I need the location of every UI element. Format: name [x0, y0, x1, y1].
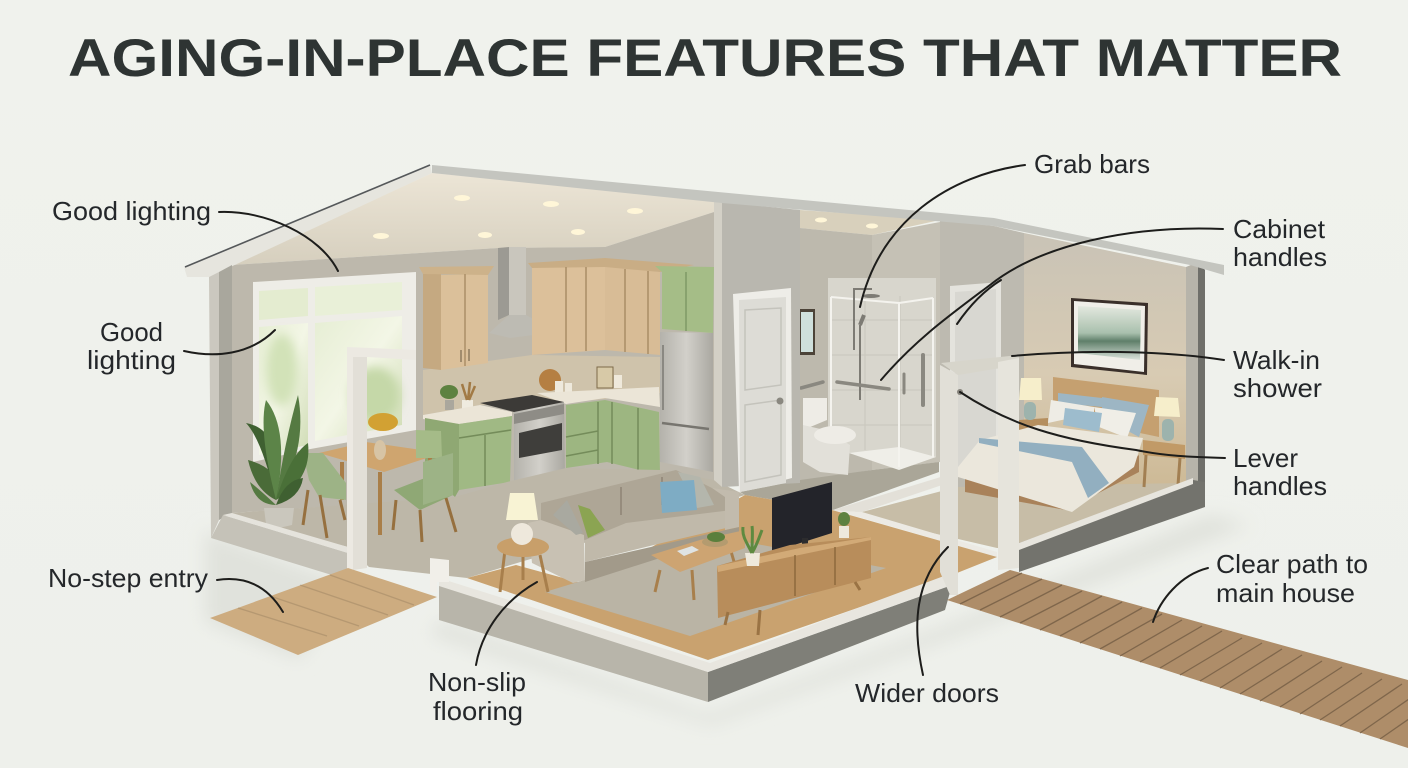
green upper cabinet [655, 266, 714, 333]
partition between kitchen and bathroom [714, 202, 800, 487]
countertop items [440, 367, 622, 415]
wall art [1071, 298, 1148, 375]
callout: clear path to main house: Clear path to [1216, 549, 1368, 579]
callout: walk-in shower [1012, 345, 1322, 403]
ground shadow [205, 515, 1250, 725]
callout: non-slip flooring [428, 582, 537, 726]
refrigerator [660, 332, 713, 472]
rug [545, 540, 886, 636]
callout: clear path to main house [1153, 549, 1368, 622]
right lamp and nightstand [1143, 397, 1185, 487]
callout: good lighting window: Good [100, 317, 163, 347]
callout: no-step entry [48, 563, 283, 612]
wood floor [467, 495, 997, 660]
grab bars [797, 350, 923, 408]
upper cabinets right [528, 258, 694, 355]
plants on cabinet [743, 512, 850, 566]
sofa pillows [678, 472, 714, 508]
bathroom ceiling [800, 210, 940, 235]
zone: bedroom [432, 165, 1224, 572]
front base wall [430, 558, 952, 702]
left lamp and nightstand [1019, 378, 1048, 430]
stove [480, 395, 565, 487]
range hood [489, 247, 557, 338]
callout: grab bars: Grab bars [1034, 149, 1150, 179]
callout: good lighting window: lighting [87, 345, 176, 375]
callout: cabinet handles: Cabinet [1233, 214, 1326, 244]
ceiling [232, 173, 714, 265]
cutaway house [184, 165, 1408, 748]
callout: wider doors [855, 547, 999, 708]
zone: wood living floor [430, 470, 997, 702]
small wall art [800, 309, 815, 355]
bathroom walls [800, 228, 872, 482]
house plant [246, 395, 308, 528]
sofa [528, 470, 739, 583]
clear path boardwalk [947, 570, 1408, 748]
green base cabinets left [425, 416, 512, 497]
kitchen backsplash [423, 355, 660, 415]
callout: lever handles [960, 392, 1327, 501]
callout: good lighting ceiling [52, 196, 338, 271]
bedroom base wall [1019, 478, 1205, 572]
callout: good lighting ceiling: Good lighting [52, 196, 211, 226]
bedroom carpet [833, 483, 1186, 548]
title: AGING-IN-PLACE FEATURES THAT MATTER [68, 29, 1342, 88]
front-left base wall [211, 513, 348, 580]
zone: bathroom [714, 202, 940, 510]
dining set [303, 413, 456, 542]
bedroom door [950, 282, 1001, 480]
green base cabinets right [566, 400, 660, 475]
carpet floor [223, 468, 745, 578]
left outer wall [209, 265, 232, 538]
callout: walk-in shower: shower [1233, 373, 1322, 403]
back wall [232, 212, 714, 513]
roof fascia [432, 165, 1224, 275]
callout: good lighting window [87, 317, 275, 375]
side table with lamp [497, 493, 549, 592]
upper cabinet left [419, 266, 494, 370]
toilet [803, 398, 856, 475]
callout: non-slip flooring: Non-slip [428, 667, 526, 697]
wider door frame [940, 355, 1019, 595]
callout: cabinet handles: handles [1233, 242, 1327, 272]
coffee table [651, 530, 745, 600]
callout: wider doors: Wider doors [855, 678, 999, 708]
bed [958, 377, 1159, 512]
callout: cabinet handles [881, 214, 1327, 380]
entry door frame [347, 347, 416, 570]
partition wall [940, 220, 1024, 545]
zone: living and kitchen room [184, 165, 745, 580]
bedroom back wall [1024, 233, 1186, 490]
window [253, 272, 416, 462]
callout: no-step entry: No-step entry [48, 563, 208, 593]
right outer wall [1186, 262, 1205, 507]
callout: lever handles: handles [1233, 471, 1327, 501]
callout: clear path to main house: main house [1216, 578, 1355, 608]
bathroom door [733, 288, 792, 492]
television [772, 482, 832, 557]
shower [828, 278, 936, 470]
tv cabinet [717, 537, 871, 635]
counters [423, 387, 660, 424]
ceiling lights [373, 195, 643, 239]
callout: grab bars [860, 149, 1150, 307]
no-step entry ramp [210, 568, 437, 655]
callout: non-slip flooring: flooring [433, 696, 523, 726]
callout: walk-in shower: Walk-in [1233, 345, 1320, 375]
roof edge [184, 165, 432, 277]
callout: lever handles: Lever [1233, 443, 1298, 473]
bathroom floor [740, 462, 939, 510]
